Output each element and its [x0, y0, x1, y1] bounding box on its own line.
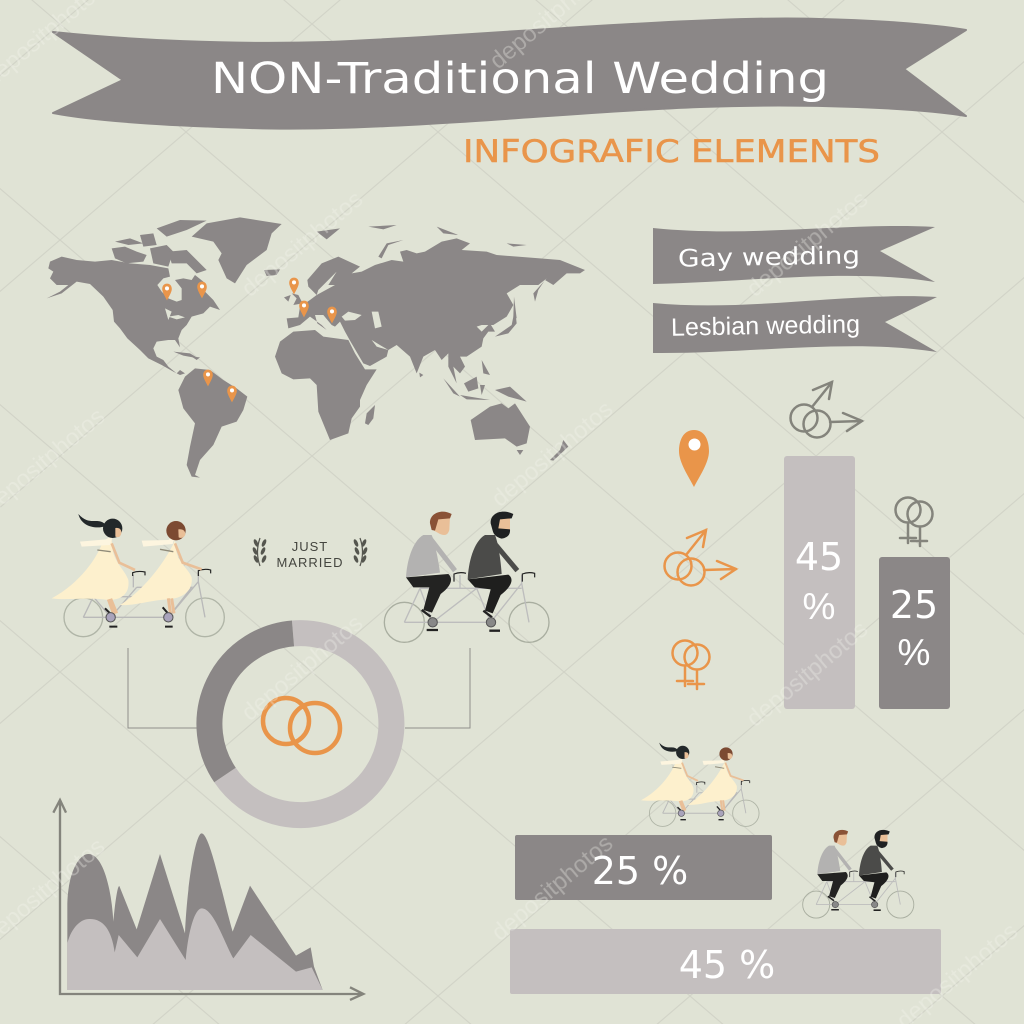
illustration: grooms on tandem [384, 512, 549, 642]
text: depositphotos [742, 616, 873, 733]
text: depositphotos [487, 830, 618, 947]
donut chart [209, 633, 391, 815]
text: depositphotos [487, 396, 618, 513]
icon: orange male symbol [664, 530, 736, 586]
text: depositphotos [237, 186, 368, 303]
just married badge [252, 538, 368, 570]
bar 45 percent [784, 456, 855, 709]
lesbian wedding ribbon: Lesbian wedding [671, 310, 860, 342]
subtitle: INFOGRAFIC ELEMENTS [463, 134, 880, 170]
horizontal bar 25 percent: 25 % [592, 849, 688, 893]
gay wedding ribbon: Gay wedding [678, 241, 860, 273]
bar 45 percent: 45 [795, 535, 843, 579]
text: depositphotos [237, 610, 368, 727]
icon: large map pin [679, 430, 709, 487]
title: NON-Traditional Wedding [211, 55, 829, 104]
bar 25 percent: % [898, 632, 930, 673]
horizontal bar 25 percent [515, 835, 772, 900]
area chart [53, 800, 363, 1000]
bar 45 percent: % [803, 586, 835, 627]
connector lines [128, 648, 470, 728]
bar 25 percent [879, 557, 950, 709]
bar 25 percent: 25 [890, 583, 938, 627]
icon: gray female symbol [896, 498, 932, 546]
just married badge: JUST [292, 539, 328, 554]
icon: gray male symbol [790, 382, 862, 438]
illustration: small brides on tandem [641, 743, 759, 826]
icon: wedding rings [263, 698, 340, 753]
illustration: small grooms on tandem [803, 830, 914, 918]
text: depositphotos [742, 186, 873, 303]
world map [47, 217, 585, 478]
illustration: brides on tandem [52, 514, 224, 637]
icon: orange female symbol [672, 640, 710, 689]
just married badge: MARRIED [277, 555, 343, 570]
lesbian wedding ribbon [653, 296, 937, 353]
title banner [53, 18, 966, 129]
horizontal bar 45 percent: 45 % [679, 943, 775, 987]
horizontal bar 45 percent [510, 929, 941, 994]
gay wedding ribbon [653, 226, 935, 284]
